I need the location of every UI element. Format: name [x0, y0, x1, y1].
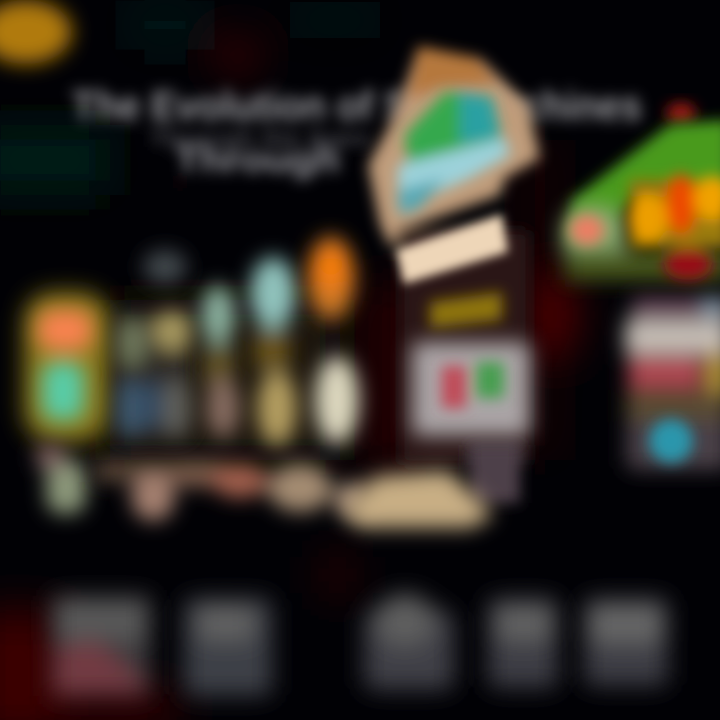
- central slot machine: [345, 46, 540, 528]
- teal dial: [649, 419, 693, 463]
- logo blob: top-left gold: [0, 0, 72, 64]
- small grey label above machines: [143, 250, 187, 284]
- machine 4: [250, 257, 297, 446]
- base row of machines: [95, 460, 370, 521]
- title: [72, 82, 642, 180]
- reels screen: [412, 342, 530, 436]
- title: Through: [175, 139, 340, 180]
- green dome: [572, 120, 720, 240]
- right slot machine: [562, 103, 720, 470]
- title: The Evolution of Slot Machines: [72, 82, 642, 129]
- coloured dome lights: [570, 174, 720, 280]
- coin tray: [345, 470, 494, 528]
- bottom captions: [52, 594, 668, 696]
- machine 1: [24, 292, 110, 514]
- caption 2: [184, 598, 272, 696]
- caption 4: [488, 598, 558, 688]
- machine 2: [115, 310, 192, 440]
- screens: [625, 298, 720, 470]
- red top light: [666, 103, 696, 123]
- title: Through the Ages: [150, 126, 370, 151]
- caption 1: [52, 596, 150, 696]
- caption 5: [584, 598, 668, 686]
- machine 5: [307, 236, 359, 444]
- machine 3: [201, 285, 240, 438]
- top display: [398, 92, 510, 215]
- yellow panel: [430, 292, 502, 328]
- machine cabinet: [368, 46, 540, 503]
- cream panel: [396, 214, 508, 284]
- caption 3: [364, 594, 454, 690]
